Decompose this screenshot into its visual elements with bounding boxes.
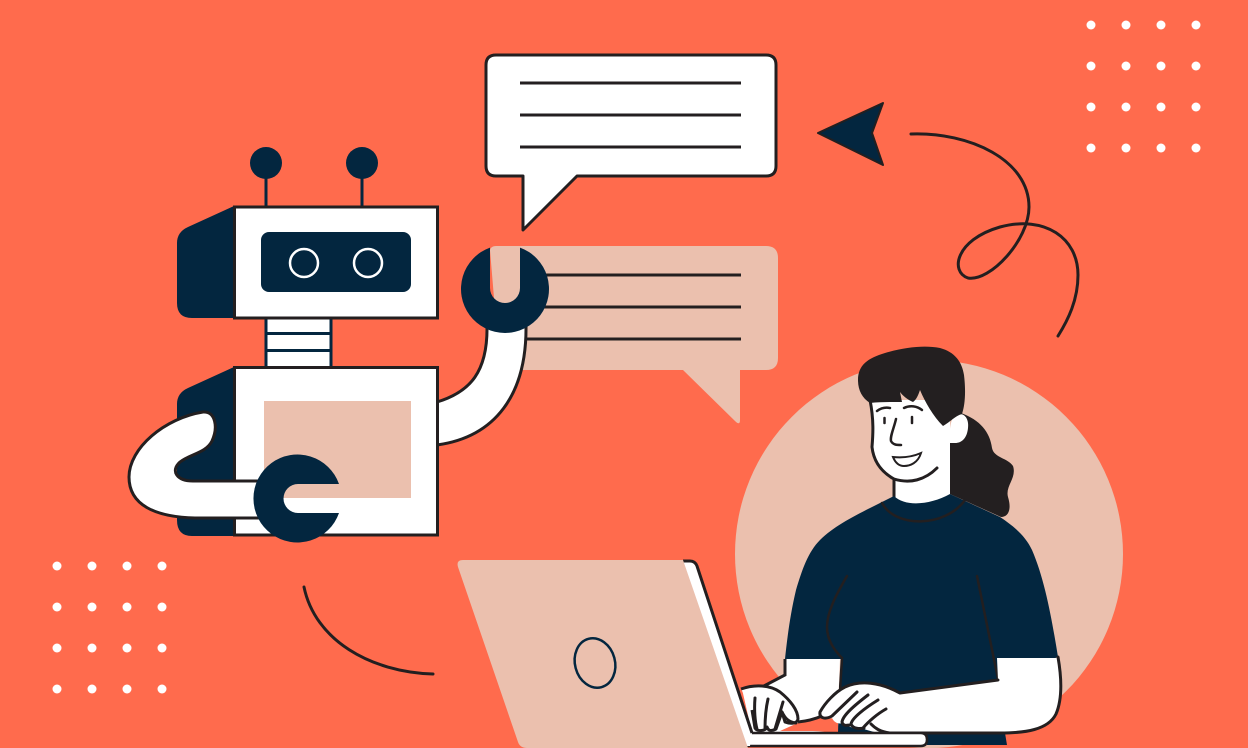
robot antennas	[250, 147, 378, 207]
robot claw: left	[253, 454, 339, 542]
laptop logo	[569, 634, 621, 692]
hair	[858, 347, 965, 426]
laptop	[458, 560, 927, 748]
speech bubble: white	[486, 55, 776, 230]
robot	[129, 147, 549, 542]
navy shirt	[785, 494, 1058, 745]
robot right arm	[437, 325, 526, 445]
arrow: looping curve	[911, 134, 1078, 336]
robot neck	[266, 318, 331, 368]
robot claw: right	[461, 248, 549, 333]
dot grid: bottom left	[52, 562, 166, 694]
laptop screen edge	[680, 560, 752, 746]
laptop lid	[458, 560, 748, 748]
speech bubble: beige	[490, 246, 778, 423]
arrow: lower left curve	[304, 587, 433, 674]
ponytail	[950, 413, 1014, 517]
icon: paper plane arrowhead	[818, 103, 883, 165]
dot grid: top right	[1086, 20, 1200, 152]
left arm and hand	[741, 659, 840, 733]
robot head	[177, 206, 438, 318]
neck and face	[870, 400, 968, 504]
robot body	[177, 367, 438, 536]
laptop base	[747, 733, 927, 746]
shirt collar and seams	[827, 500, 998, 690]
woman	[741, 347, 1061, 745]
beige circle behind woman	[735, 360, 1123, 748]
robot left arm	[129, 412, 260, 518]
right arm and hand	[820, 657, 1061, 733]
facial features	[877, 406, 922, 466]
